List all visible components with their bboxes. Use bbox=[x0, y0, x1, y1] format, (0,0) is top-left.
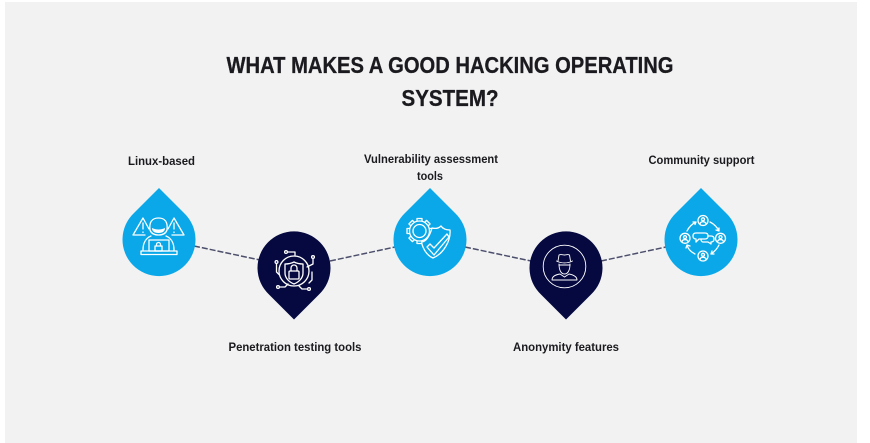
label: Anonymity features: Anonymity features bbox=[513, 342, 619, 354]
icon: community cycle with chat bubbles bbox=[680, 216, 726, 261]
label: Linux-based: Linux-based bbox=[128, 156, 195, 168]
icon: padlock shield circuit bbox=[275, 251, 314, 290]
dashed connector line bbox=[194, 246, 666, 261]
label: Vulnerability assessment tools: Vulnerability assessment bbox=[364, 154, 498, 166]
drop: Vulnerability assessment tools bbox=[394, 188, 466, 276]
icon: anonymous person in hat bbox=[543, 245, 586, 288]
label: Vulnerability assessment tools bbox=[364, 154, 498, 183]
drop: Anonymity features bbox=[529, 231, 602, 320]
title: WHAT MAKES A GOOD HACKING OPERATING bbox=[226, 52, 674, 78]
drop: Penetration testing tools bbox=[258, 231, 330, 320]
title bbox=[226, 52, 674, 111]
label: Community support: Community support bbox=[648, 155, 755, 167]
icon: hacker with warning signs bbox=[133, 218, 184, 254]
title: SYSTEM? bbox=[402, 85, 498, 111]
label: Vulnerability assessment tools: tools bbox=[417, 171, 443, 183]
icon: gear and shield check bbox=[407, 218, 450, 258]
drop: Linux-based bbox=[123, 188, 196, 276]
label: Penetration testing tools: Penetration testing tools bbox=[228, 342, 362, 354]
drop: Community support bbox=[664, 188, 737, 276]
